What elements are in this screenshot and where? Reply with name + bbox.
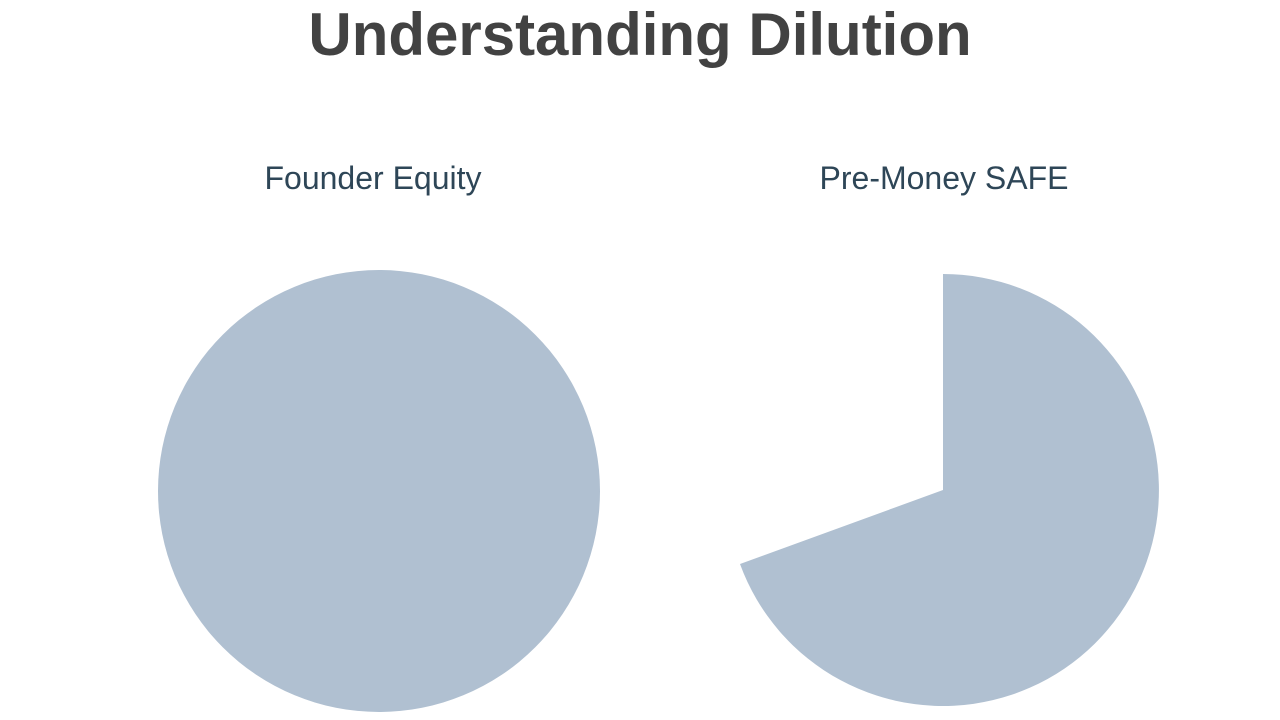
title: Understanding Dilution — [308, 1, 972, 68]
label: founder equity: Founder Equity — [264, 160, 482, 196]
pie chart: founder equity full circle — [158, 270, 600, 712]
pie chart: pre-money SAFE with missing slice — [740, 274, 1159, 706]
label: pre-money SAFE: Pre-Money SAFE — [820, 160, 1068, 196]
